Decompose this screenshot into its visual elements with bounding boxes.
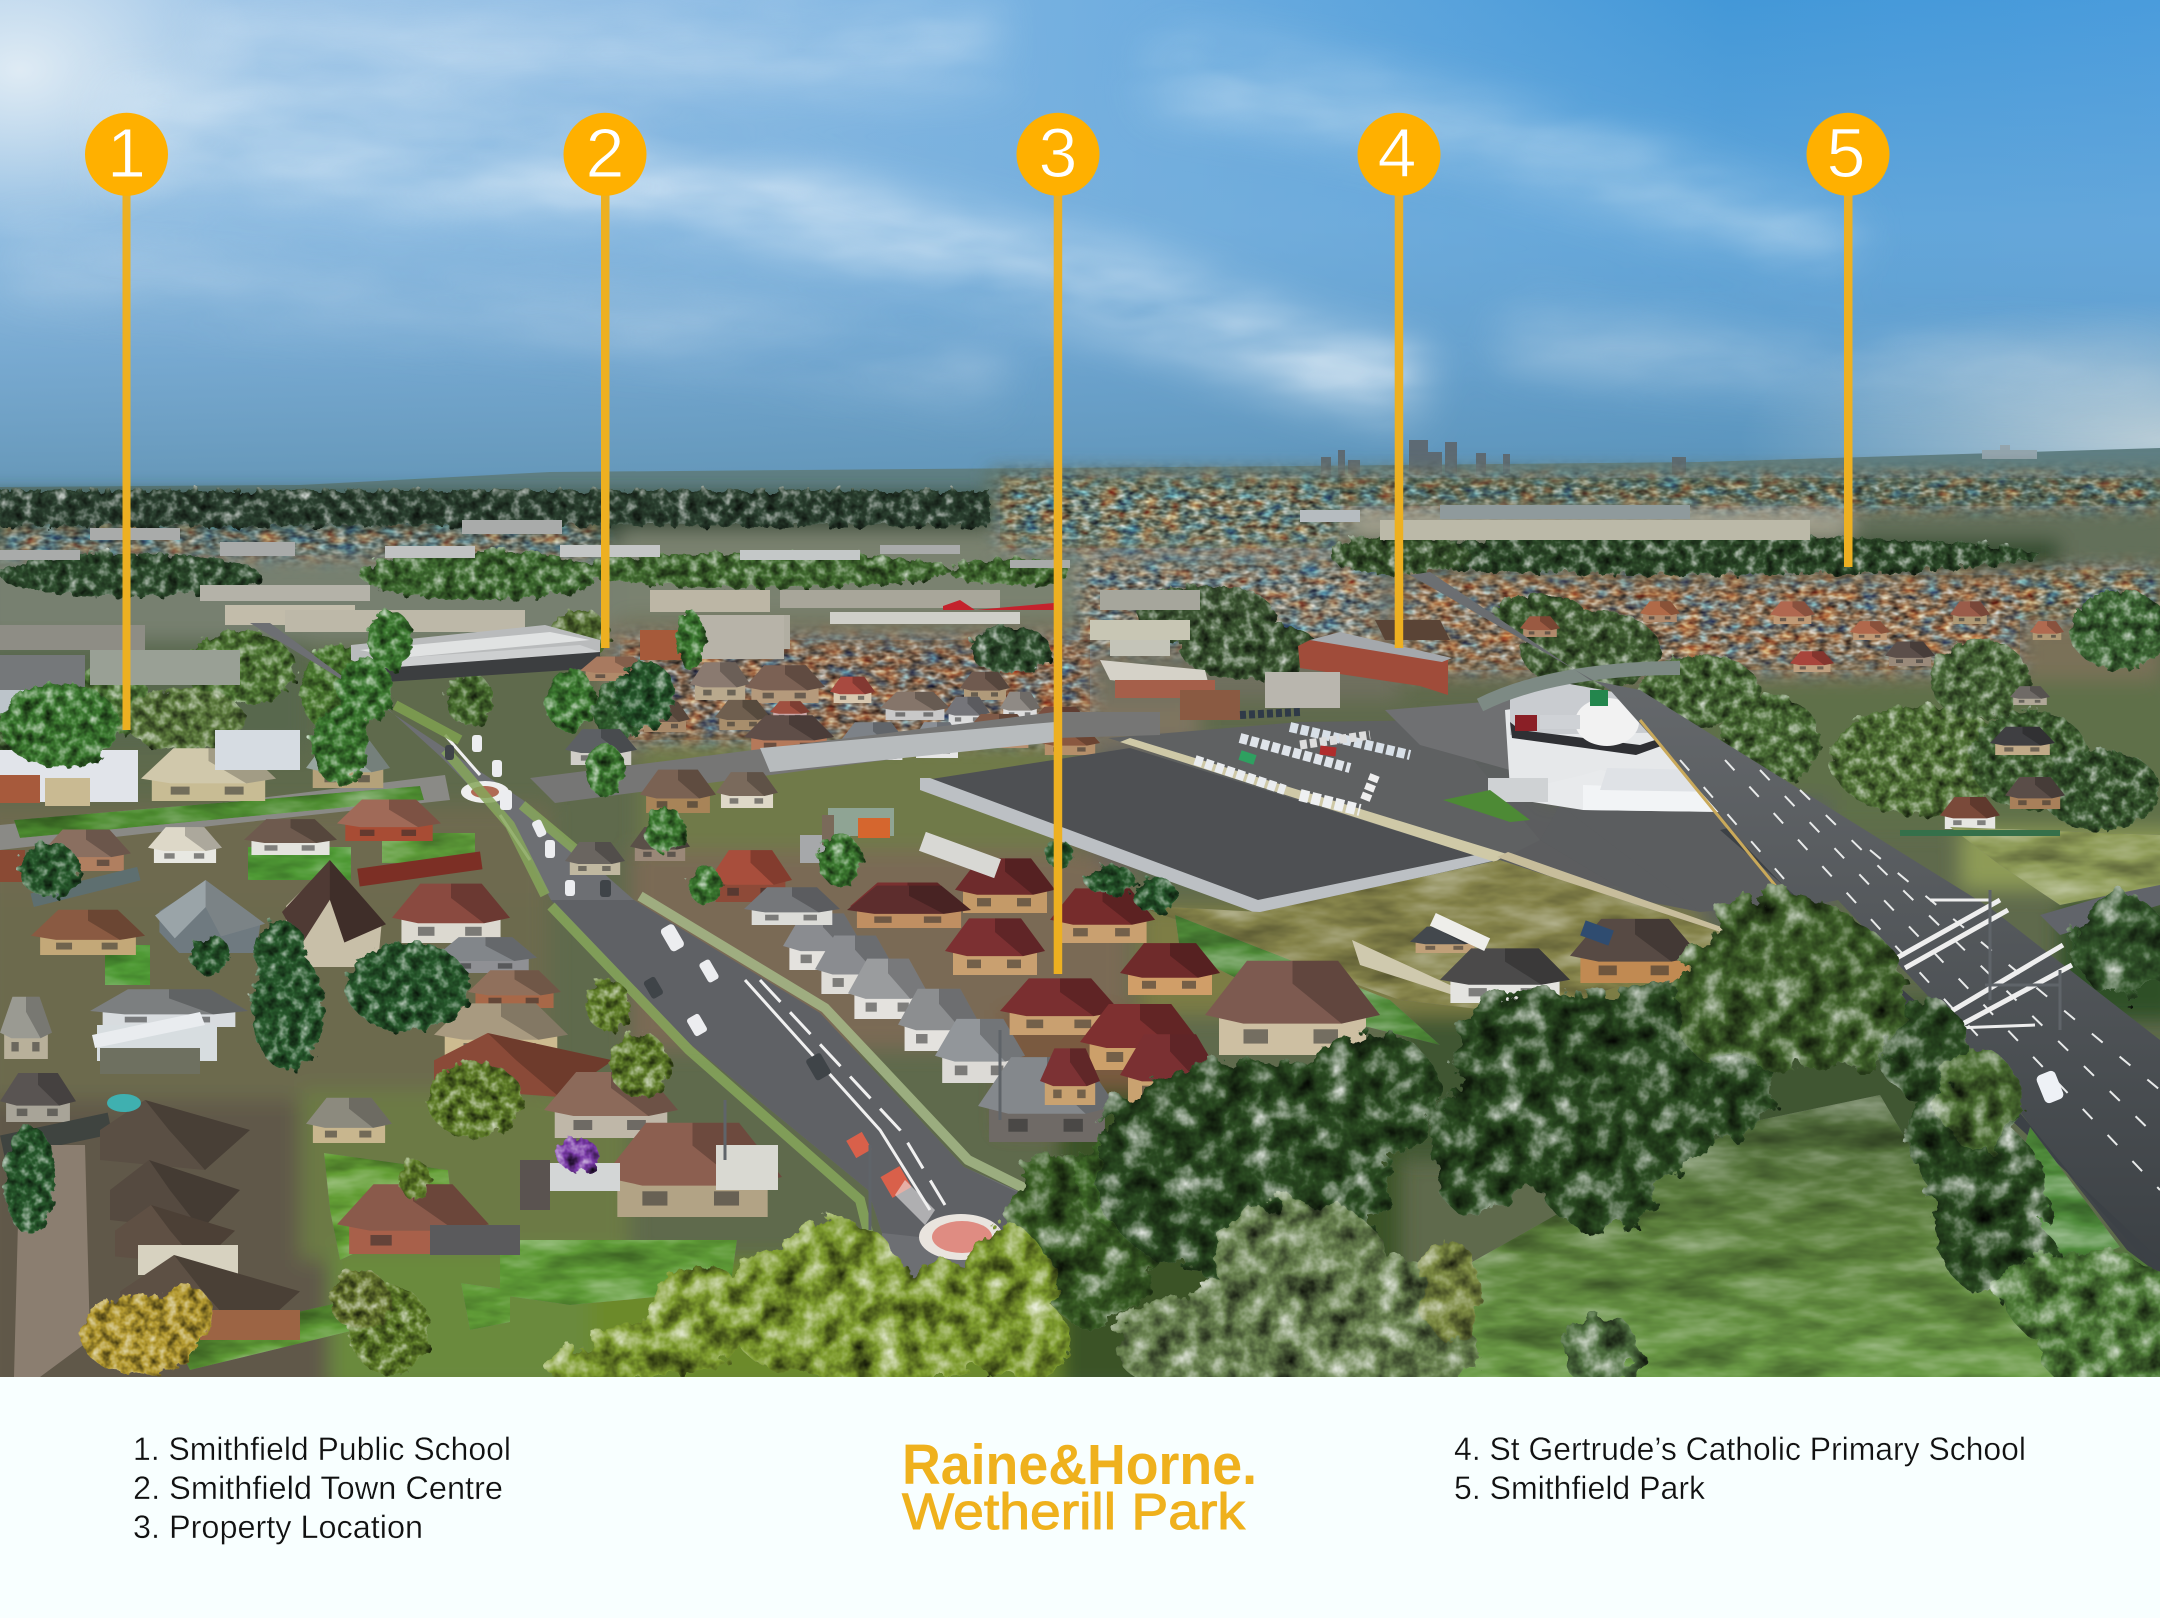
legend item 1: 1. Smithfield Public School [133, 1431, 511, 1467]
distant hills [0, 448, 2160, 498]
legend left column [133, 1431, 511, 1545]
shed and outbuildings [800, 808, 1001, 878]
footbridge and road sign [1480, 668, 1680, 706]
corner house [978, 1057, 1116, 1142]
striped warehouse [351, 625, 600, 682]
large gravel lot with fence [920, 738, 1730, 942]
left side houses [0, 730, 782, 1340]
townhouse row with grey roofs [783, 913, 1025, 1083]
parked cars on the street [445, 735, 832, 1081]
left lawns [14, 786, 737, 1370]
legend right column [1454, 1431, 2026, 1506]
purple flowering tree [557, 1138, 599, 1172]
marker 2: Smithfield Town Centre [564, 113, 646, 648]
mid-distance houses along the street [565, 729, 971, 928]
streets [0, 623, 1160, 1300]
property location maroon townhouses [850, 858, 1220, 1105]
marker 2: Smithfield Town Centre: 2 [586, 114, 624, 192]
pool [107, 1094, 141, 1112]
fence [357, 851, 483, 887]
street light poles [725, 890, 2060, 1230]
marker 5: Smithfield Park [1806, 113, 1890, 567]
red warehouse [943, 600, 1054, 610]
verges [395, 705, 1040, 1240]
road markings [445, 735, 945, 1210]
marker 1: Smithfield Public School [85, 113, 168, 730]
shopping centre building [1385, 680, 1727, 822]
cross street right [530, 712, 1160, 803]
St Gertrude's school building [1100, 620, 1452, 720]
street trees and garden trees [0, 610, 1177, 1375]
marker 3: Property Location: 3 [1039, 114, 1077, 192]
cream two-storey house [1205, 961, 1380, 1055]
townhouses on the left [100, 1100, 250, 1170]
land base layer [0, 500, 2160, 1380]
upper left properties [0, 750, 138, 802]
highway [1410, 572, 2160, 1320]
marker 4: St Gertrude's school [1358, 113, 1440, 648]
sky with clouds [0, 0, 2160, 487]
legend item 2: 2. Smithfield Town Centre [133, 1470, 503, 1506]
roundabout north [461, 781, 509, 803]
marker 5: Smithfield Park: 5 [1827, 114, 1865, 192]
logo: Raine & Horne Wetherill Park [902, 1433, 1257, 1540]
industrial buildings [0, 505, 1810, 715]
marker 1: Smithfield Public School: 1 [107, 114, 146, 192]
logo: Raine & Horne Wetherill Park: Raine&Horne. [902, 1433, 1257, 1497]
cross street at intersection [2040, 880, 2160, 935]
legend item 5: 5. Smithfield Park [1454, 1470, 1706, 1506]
cross street left [0, 775, 450, 850]
roundabout south [919, 1214, 1003, 1260]
driveway [14, 1145, 90, 1377]
cars in dealership lot [1195, 712, 1410, 810]
foreground tree canopy [550, 890, 2160, 1395]
car on highway [2035, 1069, 2065, 1105]
far tree belts [0, 490, 2160, 830]
marker 4: St Gertrude's school: 4 [1378, 114, 1416, 192]
suburb roofs mid-distance [580, 601, 2065, 829]
rear houses by the vacant lot [1352, 913, 1700, 1015]
grass beside highway [1135, 827, 2160, 1270]
logo: Raine & Horne Wetherill Park: Wetherill Park [902, 1483, 1246, 1540]
main street [250, 623, 1045, 1300]
city skyline [1321, 440, 2037, 471]
legend item 3: 3. Property Location [133, 1509, 423, 1545]
park lawn [1380, 1095, 2060, 1377]
distant suburbs texture [0, 478, 2160, 740]
legend item 4: 4. St Gertrude’s Catholic Primary School [1454, 1431, 2026, 1467]
mid ground parking and asphalt [1108, 720, 1805, 912]
marker 3: Property Location [1016, 113, 1100, 974]
